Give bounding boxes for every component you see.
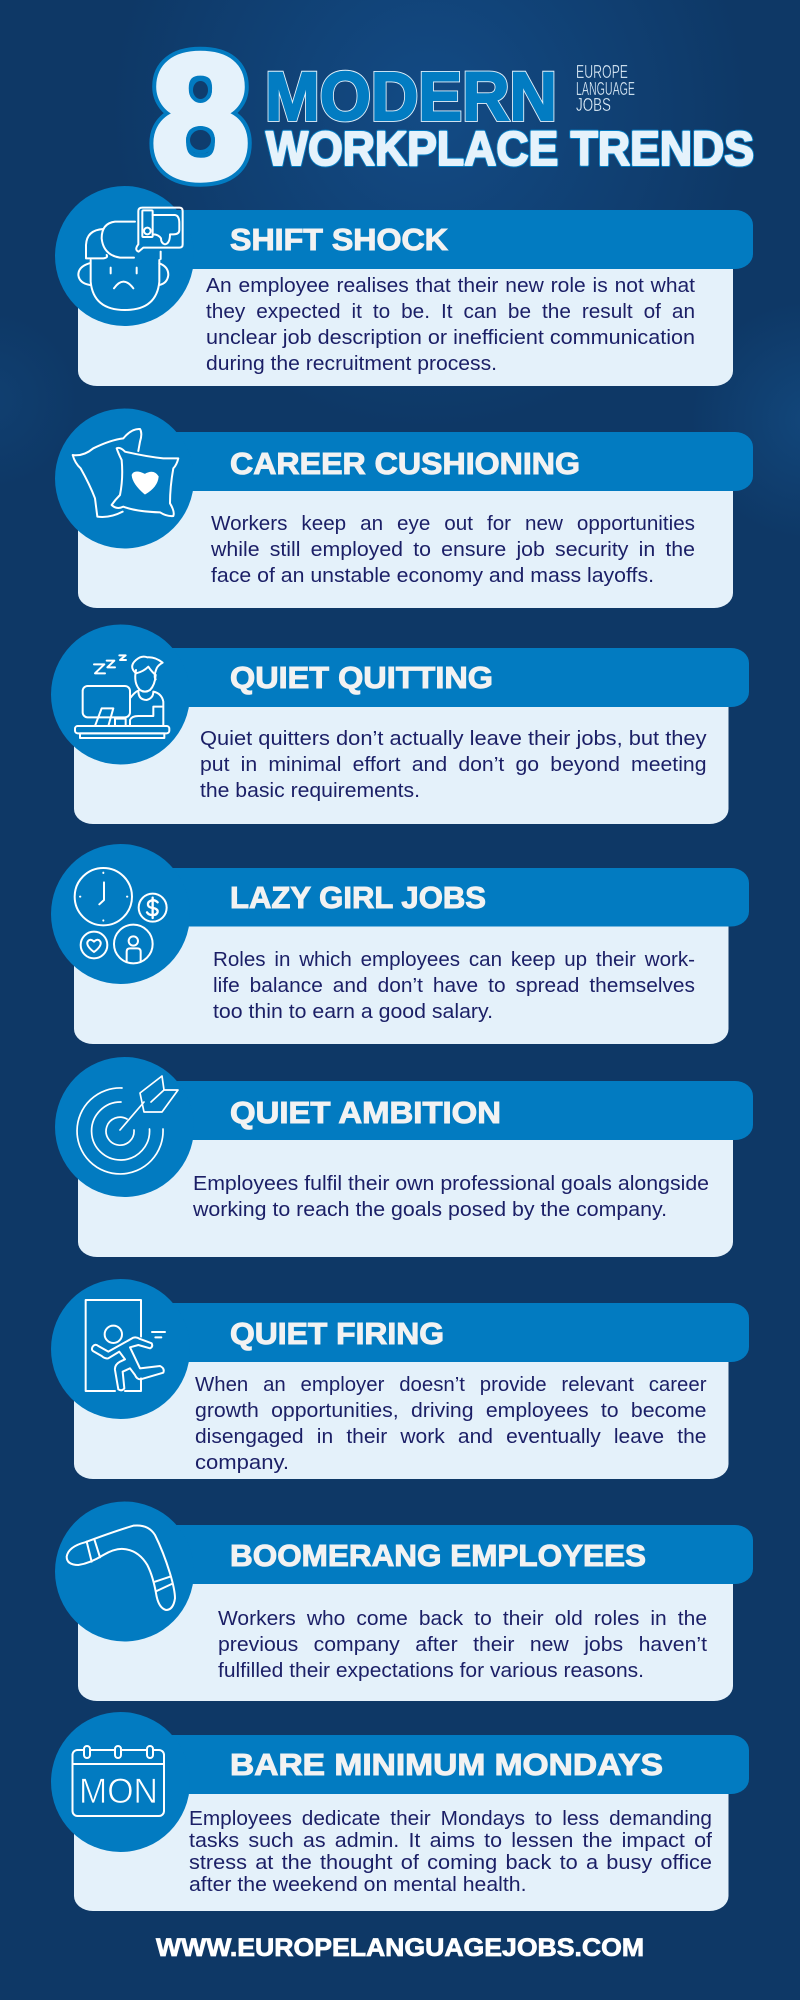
body text: tasks such as admin. It aims to lessen the impact of — [189, 1830, 712, 1852]
body text — [206, 275, 695, 375]
header bar — [125, 210, 753, 269]
body text: disengaged in their work and eventually leave the — [195, 1426, 706, 1448]
body text: working to reach the goals posed by the company. — [192, 1199, 667, 1221]
body text: while still employed to ensure job security in the — [210, 539, 695, 561]
icon circle — [55, 1502, 194, 1642]
icon: person running out of door — [86, 1300, 165, 1391]
logo: LANGUAGE — [576, 79, 635, 99]
body text: Employees dedicate their Mondays to less demanding — [189, 1808, 712, 1830]
heading: BOOMERANG EMPLOYEES — [230, 1538, 646, 1573]
icon circle — [55, 408, 194, 548]
body text — [200, 728, 706, 802]
heading: QUIET AMBITION — [230, 1095, 501, 1130]
body text: the basic requirements. — [200, 780, 420, 802]
panel: shift shock — [55, 186, 753, 386]
card — [78, 240, 733, 386]
heading: QUIET QUITTING — [230, 660, 493, 695]
icon circle — [51, 1712, 190, 1852]
icon: cushions — [73, 429, 178, 517]
panel: quiet ambition — [55, 1057, 753, 1257]
body text: Workers keep an eye out for new opportunities — [211, 513, 695, 535]
card — [78, 462, 733, 608]
numeral 8: 8 — [152, 20, 249, 215]
panel: bare minimum mondays — [51, 1712, 749, 1911]
heading: LAZY GIRL JOBS — [230, 880, 486, 915]
icon circle — [51, 844, 190, 984]
panel: lazy girl jobs — [51, 844, 749, 1044]
card — [74, 1333, 728, 1479]
body text: An employee realises that their new role is not what — [206, 275, 695, 297]
card — [74, 898, 728, 1044]
icon circle — [55, 1057, 194, 1197]
body text: fulfilled their expectations for various reasons. — [218, 1660, 644, 1682]
body text: Workers who come back to their old roles in the — [218, 1608, 707, 1630]
body text: Quiet quitters don’t actually leave their jobs, but they — [200, 728, 706, 750]
icon: sleeping at desk — [75, 655, 169, 738]
icon: boomerang — [67, 1525, 175, 1610]
numeral 8: 8 — [152, 20, 249, 215]
header bar — [121, 648, 749, 707]
body text: they expected it to be. It can be the result of an — [206, 301, 695, 323]
panel: quiet firing — [51, 1279, 749, 1479]
body text: stress at the thought of coming back to a busy office — [189, 1852, 712, 1874]
header bar — [125, 432, 753, 491]
card — [74, 1765, 728, 1911]
body text — [192, 1173, 709, 1221]
header bar — [121, 1735, 749, 1794]
body text: When an employer doesn’t provide relevant career — [195, 1374, 707, 1396]
heading: CAREER CUSHIONING — [230, 446, 580, 481]
logo: JOBS — [576, 95, 611, 115]
card — [78, 1555, 733, 1701]
body text — [195, 1374, 707, 1474]
panel: boomerang employees — [55, 1502, 753, 1701]
logo — [576, 62, 635, 115]
heading: SHIFT SHOCK — [230, 222, 449, 257]
footer url: WWW.EUROPELANGUAGEJOBS.COM — [156, 1934, 644, 1962]
icon: target and dart — [77, 1076, 178, 1174]
card — [78, 1111, 733, 1257]
icon: calendar monday — [72, 1746, 164, 1816]
icon circle — [55, 186, 194, 326]
panel: career cushioning — [55, 408, 753, 608]
heading: modern: MODERN — [265, 58, 557, 135]
heading: workplace trends: WORKPLACE TRENDS — [266, 123, 754, 176]
heading: workplace trends: WORKPLACE TRENDS — [266, 123, 754, 176]
header bar — [121, 1303, 749, 1362]
card — [74, 678, 728, 824]
icon: thumbs-down thought over sad face — [78, 208, 183, 310]
heading: BARE MINIMUM MONDAYS — [230, 1747, 663, 1782]
body text: face of an unstable economy and mass layoffs. — [211, 565, 654, 587]
body text — [210, 513, 695, 587]
body text: unclear job description or inefficient communication — [206, 327, 695, 349]
body text: after the weekend on mental health. — [189, 1874, 526, 1896]
body text: too thin to earn a good salary. — [213, 1001, 493, 1023]
body text: growth opportunities, driving employees to become — [195, 1400, 706, 1422]
header bar — [121, 868, 749, 926]
body text: put in minimal effort and don’t go beyond meeting — [200, 754, 706, 776]
logo: EUROPE — [576, 62, 628, 82]
body text — [218, 1608, 707, 1682]
header bar — [125, 1525, 753, 1584]
heading: QUIET FIRING — [230, 1316, 444, 1351]
icon: calendar monday: MON — [79, 1772, 158, 1811]
body text: Employees fulfil their own professional goals alongside — [193, 1173, 709, 1195]
icon circle — [51, 624, 190, 764]
body text — [189, 1808, 712, 1896]
header bar — [125, 1081, 753, 1140]
title — [152, 20, 754, 215]
panel: quiet quitting — [51, 624, 749, 824]
body text: life balance and don’t have to spread themselves — [213, 975, 695, 997]
body text: previous company after their new jobs haven’t — [218, 1634, 707, 1656]
body text — [213, 949, 695, 1023]
icon circle — [51, 1279, 190, 1419]
body text: Roles in which employees can keep up their work- — [213, 949, 695, 971]
body text: during the recruitment process. — [206, 353, 497, 375]
icon: clock, money, heart and person — [75, 868, 167, 963]
body text: company. — [195, 1452, 289, 1474]
heading: modern: MODERN — [265, 58, 557, 135]
